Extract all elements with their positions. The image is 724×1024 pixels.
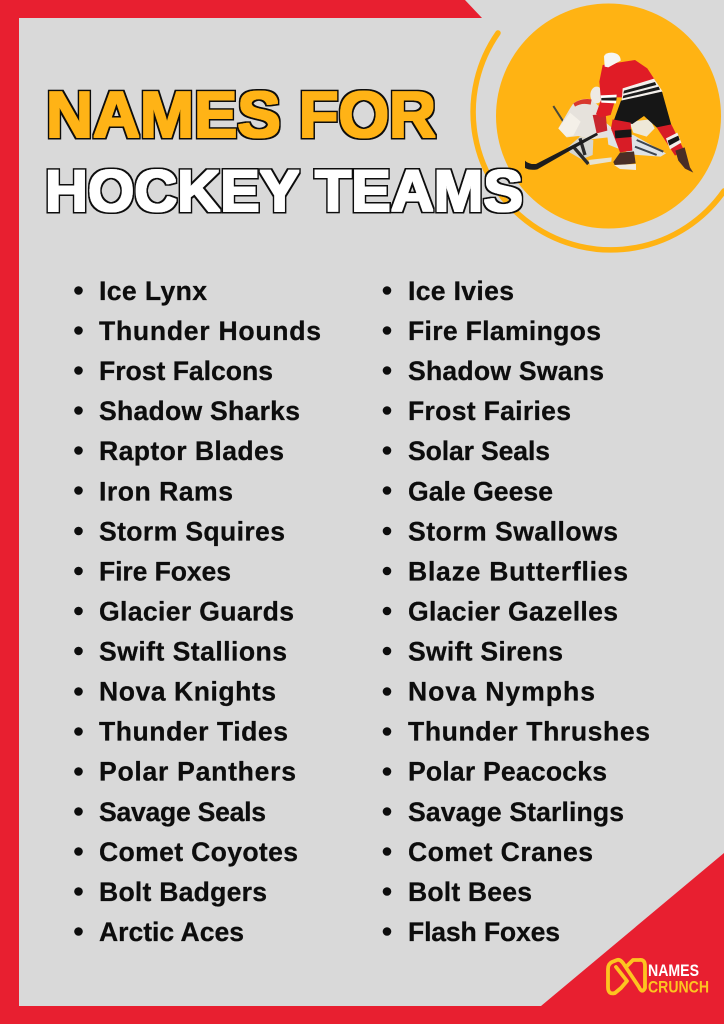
list column 1: Comet Coyotes	[99, 837, 298, 867]
title	[45, 78, 523, 224]
list column 1: Fire Foxes	[99, 556, 231, 586]
list column 1	[74, 276, 321, 947]
red frame: bottom border and corner triangle	[19, 853, 724, 1024]
list column 2: Thunder Thrushes	[408, 717, 650, 747]
bullets column 1	[74, 286, 83, 936]
logo: names crunch	[608, 960, 709, 996]
list column 1: Shadow Sharks	[99, 396, 300, 426]
list column 2: Bolt Bees	[408, 877, 532, 907]
list column 1: Savage Seals	[99, 797, 266, 827]
list column 1: Thunder Hounds	[99, 316, 321, 346]
list column 1: Nova Knights	[99, 677, 276, 707]
list column 2: Flash Foxes	[408, 917, 560, 947]
list column 2: Ice Ivies	[408, 276, 514, 306]
list column 2: Storm Swallows	[408, 516, 618, 546]
title line: hockey teams: HOCKEY TEAMS	[45, 159, 523, 224]
yellow ring arc	[473, 33, 724, 250]
bullets column 2	[383, 286, 391, 936]
icon: N mark	[608, 960, 645, 993]
list column 1: Glacier Guards	[99, 596, 294, 626]
yellow circle	[496, 4, 721, 228]
list column 2: Shadow Swans	[408, 356, 604, 386]
list column 2: Solar Seals	[408, 436, 550, 466]
list column 1: Ice Lynx	[99, 276, 207, 306]
list column 1: Arctic Aces	[99, 917, 244, 947]
icon: hockey players	[525, 53, 693, 173]
logo wordmark: NAMES	[648, 962, 699, 980]
list column 2: Blaze Butterflies	[408, 556, 628, 586]
red frame: top and left border	[0, 0, 482, 1024]
list column 2: Polar Peacocks	[408, 757, 607, 787]
list column 1: Frost Falcons	[99, 356, 273, 386]
list column 2	[383, 276, 650, 947]
list column 1: Thunder Tides	[99, 717, 288, 747]
list column 2: Savage Starlings	[408, 797, 624, 827]
list column 1: Iron Rams	[99, 476, 233, 506]
list column 2: Gale Geese	[408, 476, 553, 506]
logo: names crunch: CRUNCH	[648, 978, 709, 996]
list column 1: Bolt Badgers	[99, 877, 267, 907]
list column 2: Frost Fairies	[408, 396, 571, 426]
list column 1: Swift Stallions	[99, 636, 287, 666]
list column 1: Raptor Blades	[99, 436, 284, 466]
list column 2: Fire Flamingos	[408, 316, 601, 346]
list column 2: Nova Nymphs	[408, 677, 595, 707]
list column 2: Glacier Gazelles	[408, 596, 618, 626]
list column 2: Swift Sirens	[408, 636, 563, 666]
list column 1: Polar Panthers	[99, 757, 296, 787]
list column 2: Comet Cranes	[408, 837, 593, 867]
list column 1: Storm Squires	[99, 516, 285, 546]
title line: names for: NAMES FOR	[46, 78, 436, 151]
